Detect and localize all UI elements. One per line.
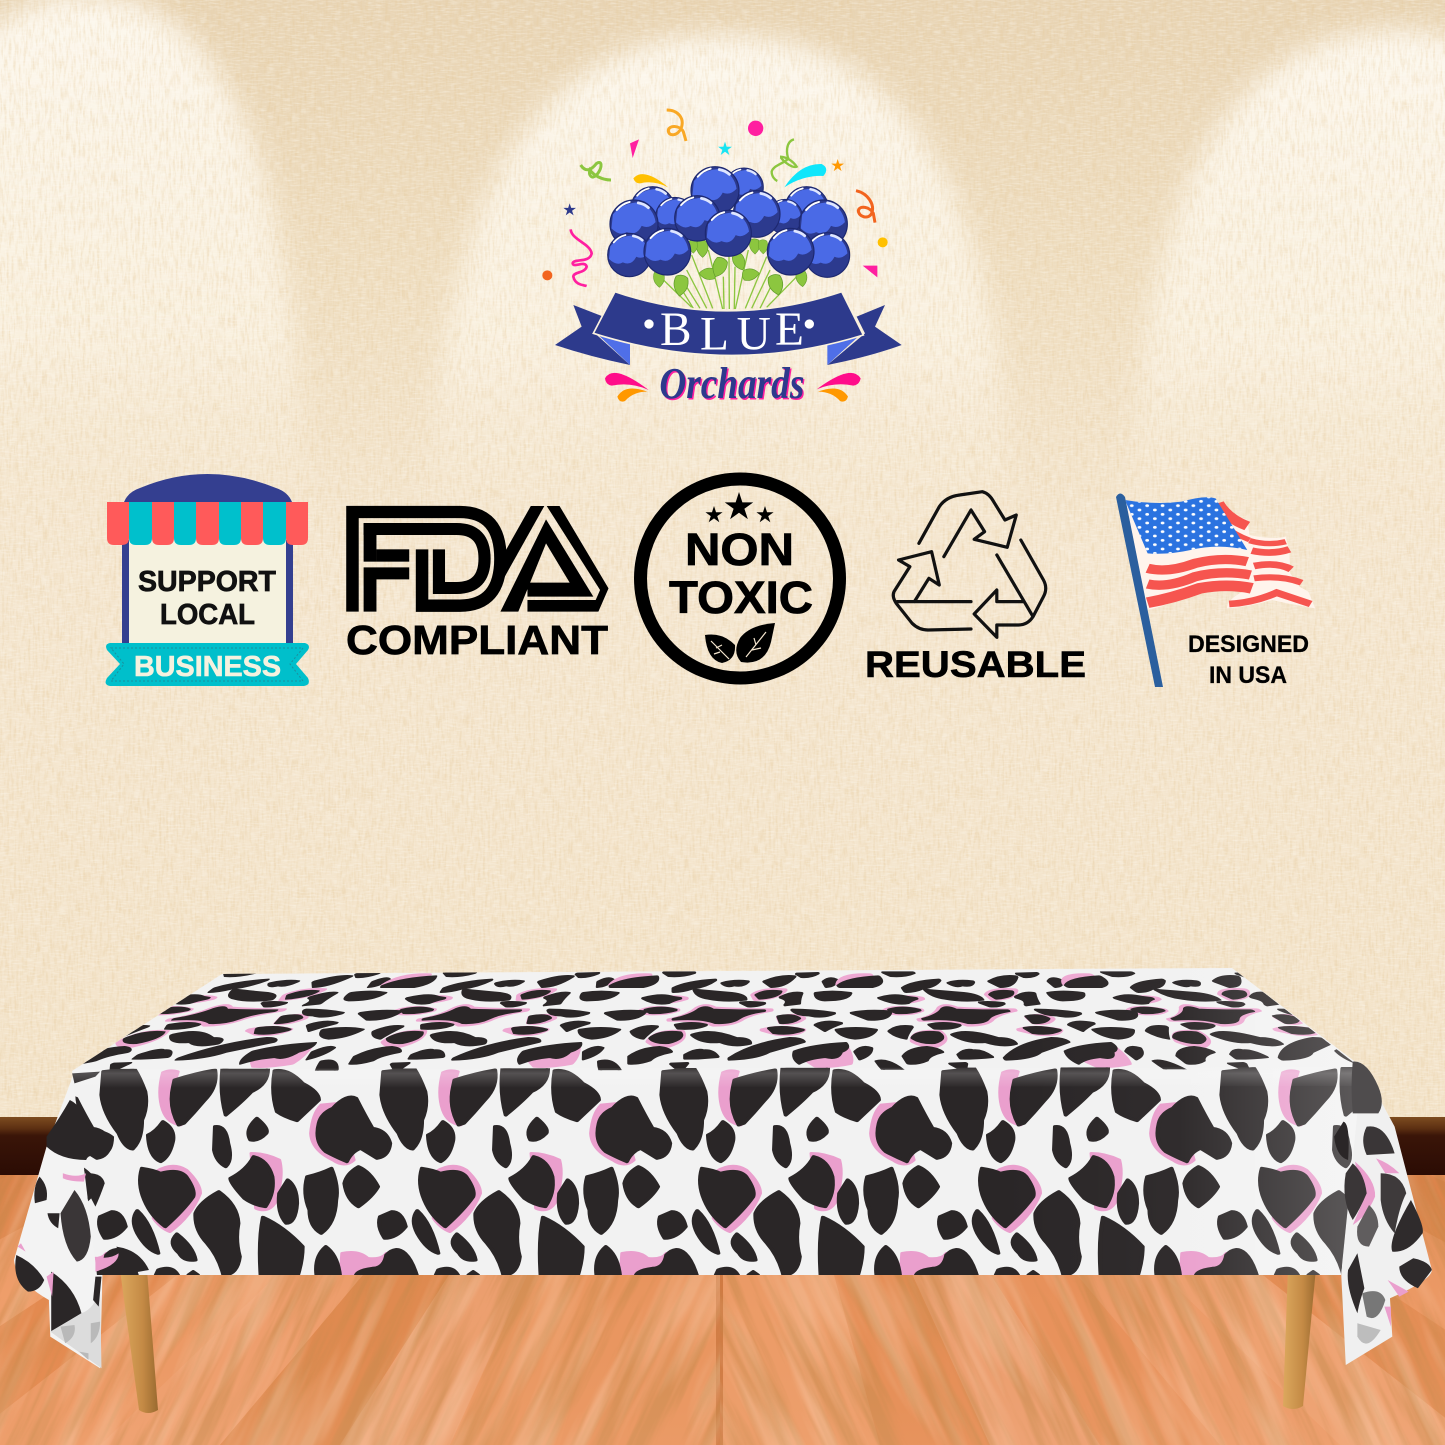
- leaves: [653, 239, 808, 297]
- cow print on front panel: [75, 1067, 1353, 1275]
- text: Reusable: REUSABLE: [865, 643, 1086, 685]
- badge: Support Local Business: [106, 474, 309, 686]
- text: Designed in USA: DESIGNED: [1188, 631, 1309, 658]
- flag pole: [1116, 494, 1163, 687]
- brand name BLUE: BLUE: [660, 304, 804, 360]
- banner: [106, 643, 309, 686]
- text: Compliant: COMPLIANT: [346, 617, 608, 663]
- tablecloth: [0, 968, 1445, 1368]
- leaves: [705, 623, 775, 663]
- badge: Non Toxic: [640, 479, 840, 678]
- awning dome: [124, 474, 292, 502]
- ribbon: [555, 292, 902, 365]
- text: Business: BUSINESS: [134, 651, 281, 683]
- table leg left: [120, 1270, 158, 1413]
- wall background: [0, 0, 1445, 1117]
- logo: Blue Orchards: [542, 110, 902, 410]
- text: Designed in USA: [1188, 631, 1309, 689]
- text: Support Local: LOCAL: [160, 599, 255, 631]
- stars: [705, 492, 774, 522]
- stems: [660, 250, 797, 309]
- text: Non Toxic: TOXIC: [669, 572, 813, 623]
- right drape spots: [1334, 1062, 1432, 1344]
- cloth right drape shape: [1315, 1062, 1432, 1365]
- cow print on table top: [83, 971, 1353, 1071]
- table leg right: [1283, 1268, 1316, 1409]
- confetti: [542, 110, 888, 286]
- cloth top and front: [72, 968, 1362, 1275]
- ring: [640, 479, 840, 678]
- text: Non Toxic: [669, 524, 813, 623]
- text: Support Local: SUPPORT: [138, 566, 277, 598]
- badge: Designed in USA: [1116, 494, 1315, 689]
- brand name Orchards: Orchards: [659, 359, 804, 408]
- badge: FDA Compliant: [346, 506, 609, 663]
- shop body: [122, 540, 293, 648]
- blueberries: [608, 167, 850, 277]
- baseboard: [0, 1117, 1445, 1175]
- left drape spots: [15, 1072, 149, 1368]
- brand name Orchards: Orchards: [661, 361, 806, 410]
- text: Non Toxic: NON: [685, 524, 794, 575]
- fold highlight: [72, 1067, 1362, 1088]
- text: Designed in USA: IN USA: [1209, 662, 1287, 689]
- flag: [1125, 497, 1315, 610]
- cloth left drape shape: [14, 1070, 154, 1368]
- FDA logo mark: [352, 506, 609, 612]
- sheen on right side: [1000, 968, 1362, 1275]
- wood floor: [0, 1175, 1445, 1445]
- recycle arrows: [893, 492, 1046, 637]
- awning stripes: [107, 502, 308, 545]
- badge: Reusable: [865, 492, 1086, 685]
- text: Support Local: [138, 566, 277, 631]
- swooshes: [605, 373, 861, 402]
